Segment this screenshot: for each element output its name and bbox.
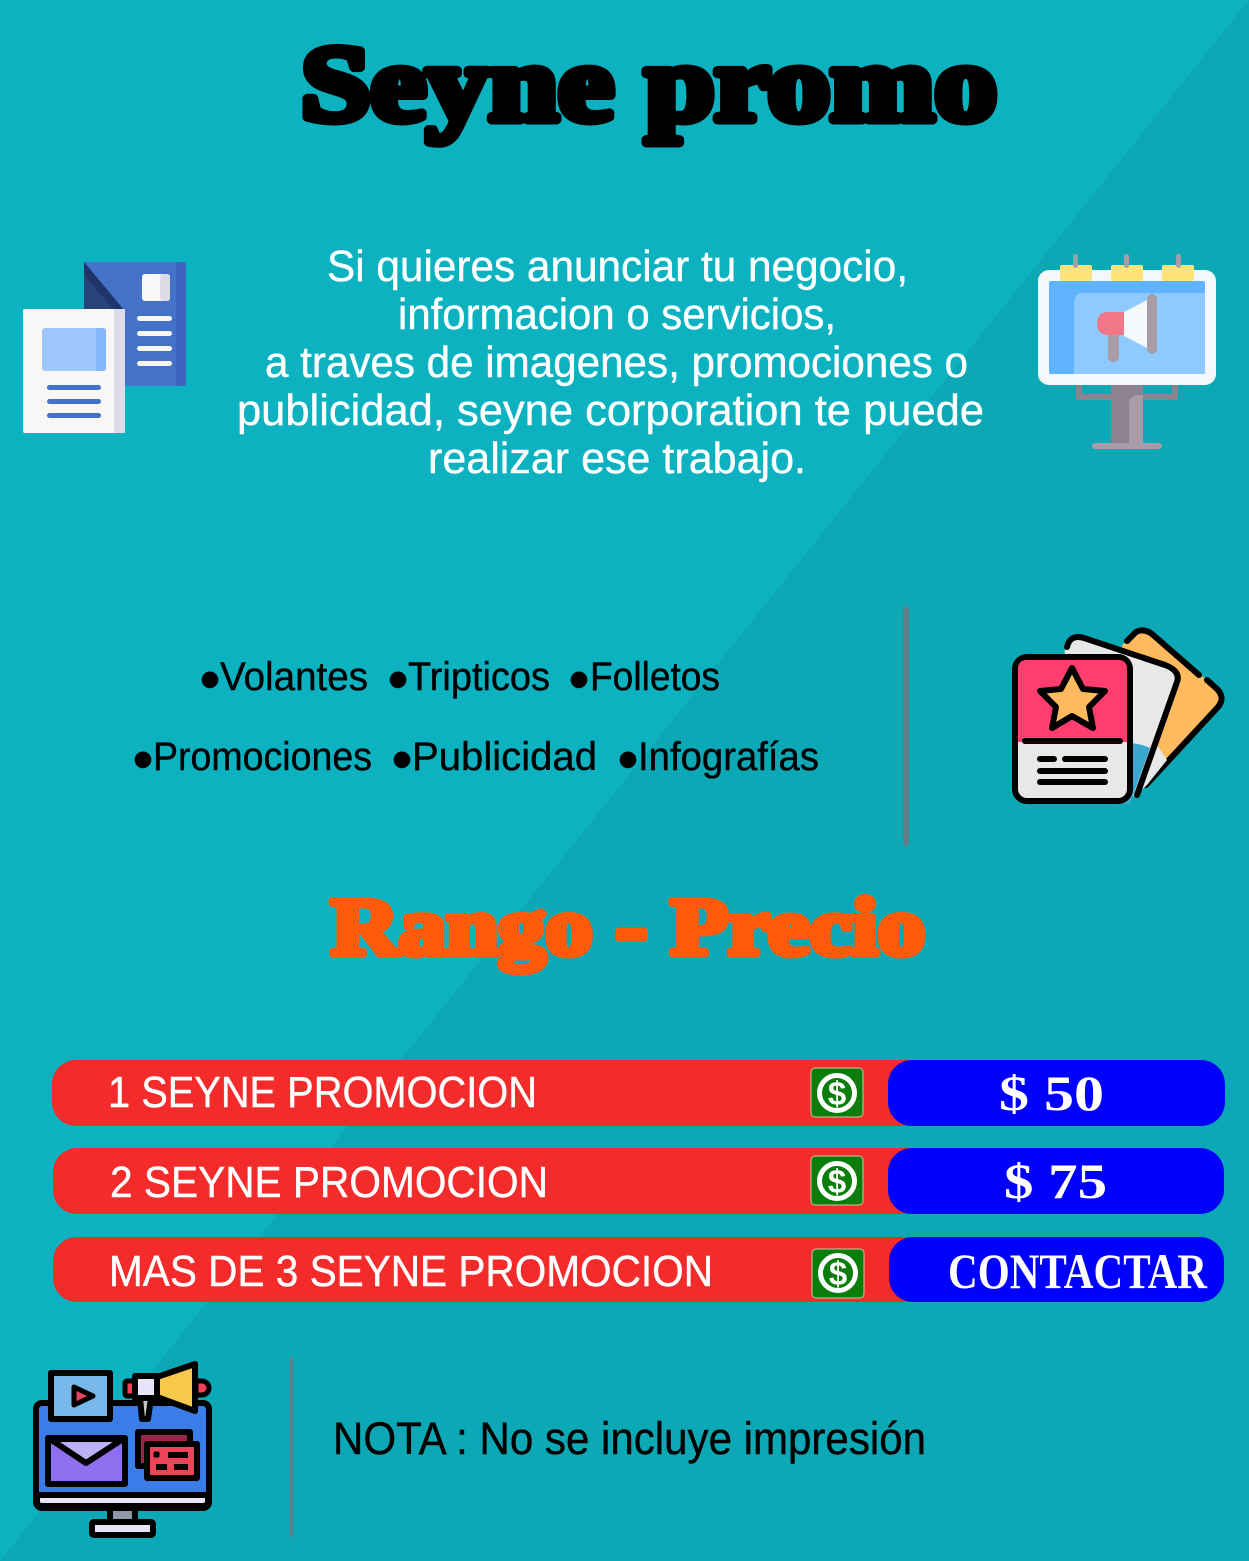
- service list: Infografías: [638, 735, 819, 779]
- service list: •: [391, 726, 413, 793]
- icon: dollar: [811, 1068, 863, 1117]
- heading: rango precio: Rango - Precio: [331, 881, 925, 972]
- icon: flyers: [1015, 630, 1222, 804]
- icon: dollar: $: [828, 1075, 846, 1112]
- service list: Promociones: [153, 735, 372, 779]
- service list: •: [199, 646, 221, 713]
- price row 2: [53, 1148, 1224, 1214]
- service list: •: [617, 726, 639, 793]
- icon: billboard: [1038, 254, 1216, 449]
- intro text: realizar ese trabajo.: [428, 434, 806, 483]
- intro text: informacion o servicios,: [398, 290, 836, 339]
- price row 1: $ 50: [999, 1065, 1104, 1121]
- price row 2: $ 75: [1004, 1153, 1107, 1209]
- intro text: [237, 242, 984, 483]
- icon: documents: [23, 262, 186, 433]
- title: Seyne promo: [301, 25, 997, 144]
- intro text: Si quieres anunciar tu negocio,: [327, 242, 908, 291]
- icon: digital marketing monitor: [36, 1364, 209, 1535]
- price row 3: MAS DE 3 SEYNE PROMOCION: [109, 1247, 713, 1296]
- intro text: a traves de imagenes, promociones o: [265, 338, 968, 387]
- icon: dollar: $: [829, 1255, 847, 1292]
- price row 3: [53, 1237, 1224, 1302]
- icon: dollar: [811, 1156, 863, 1205]
- intro text: publicidad, seyne corporation te puede: [237, 386, 984, 435]
- service list: Volantes: [220, 655, 368, 699]
- service list: Publicidad: [412, 735, 597, 779]
- service list: •: [387, 646, 409, 713]
- icon: dollar: $: [828, 1163, 846, 1200]
- service list: [132, 646, 819, 793]
- note: NOTA : No se incluye impresión: [333, 1413, 926, 1464]
- price row 2: 2 SEYNE PROMOCION: [110, 1158, 548, 1207]
- price row 1: [52, 1060, 1225, 1126]
- service list: •: [132, 726, 154, 793]
- price row 1: 1 SEYNE PROMOCION: [108, 1068, 537, 1117]
- service list: •: [568, 646, 590, 713]
- service list: Folletos: [590, 655, 720, 699]
- service list: Tripticos: [408, 655, 550, 699]
- icon: dollar: [812, 1249, 864, 1298]
